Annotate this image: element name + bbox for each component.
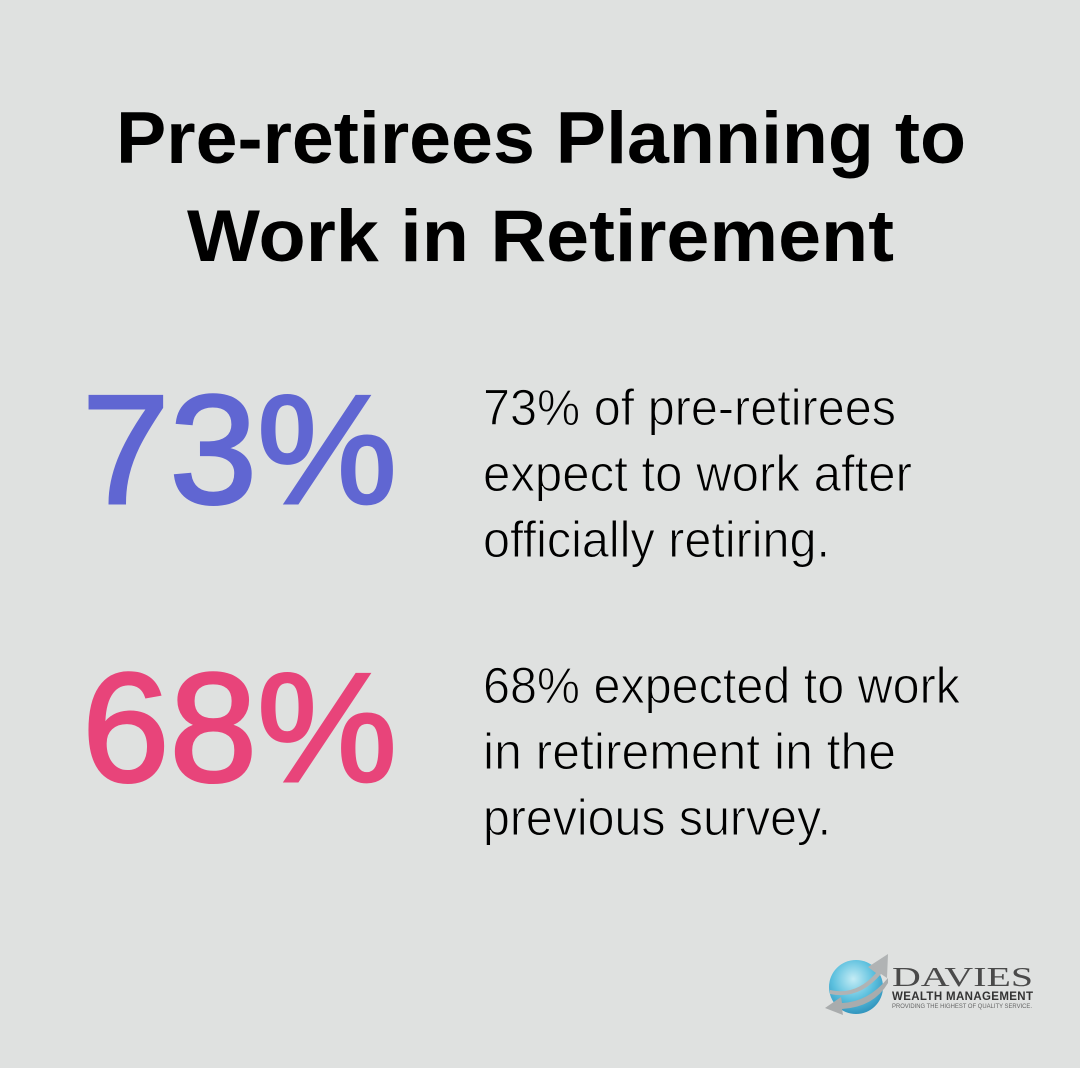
logo: Davies Wealth Management — [825, 954, 1033, 1015]
text block: 68% description: previous survey. — [483, 789, 831, 846]
title: Work in Retirement — [187, 196, 894, 277]
stat: 68%: 68% — [82, 641, 397, 814]
icon: globe with arrows — [825, 954, 888, 1015]
logo tagline: PROVIDING THE HIGHEST OF QUALITY SERVICE. — [892, 1003, 1032, 1010]
logo wordmark: DAVIES — [892, 962, 1033, 992]
logo subtitle: WEALTH MANAGEMENT — [892, 991, 1033, 1003]
text block: 73% description: 73% of pre-retirees — [483, 379, 896, 436]
text block: 73% description: expect to work after — [483, 445, 912, 502]
title: Pre-retirees Planning to — [116, 98, 966, 179]
text block: 73% description: officially retiring. — [483, 511, 830, 568]
text block: 68% description — [483, 657, 960, 846]
text block: 68% description: 68% expected to work — [483, 657, 960, 714]
stat: 73%: 73% — [82, 363, 397, 536]
title — [116, 98, 966, 277]
text block: 68% description: in retirement in the — [483, 723, 896, 780]
text block: 73% description — [483, 379, 912, 568]
